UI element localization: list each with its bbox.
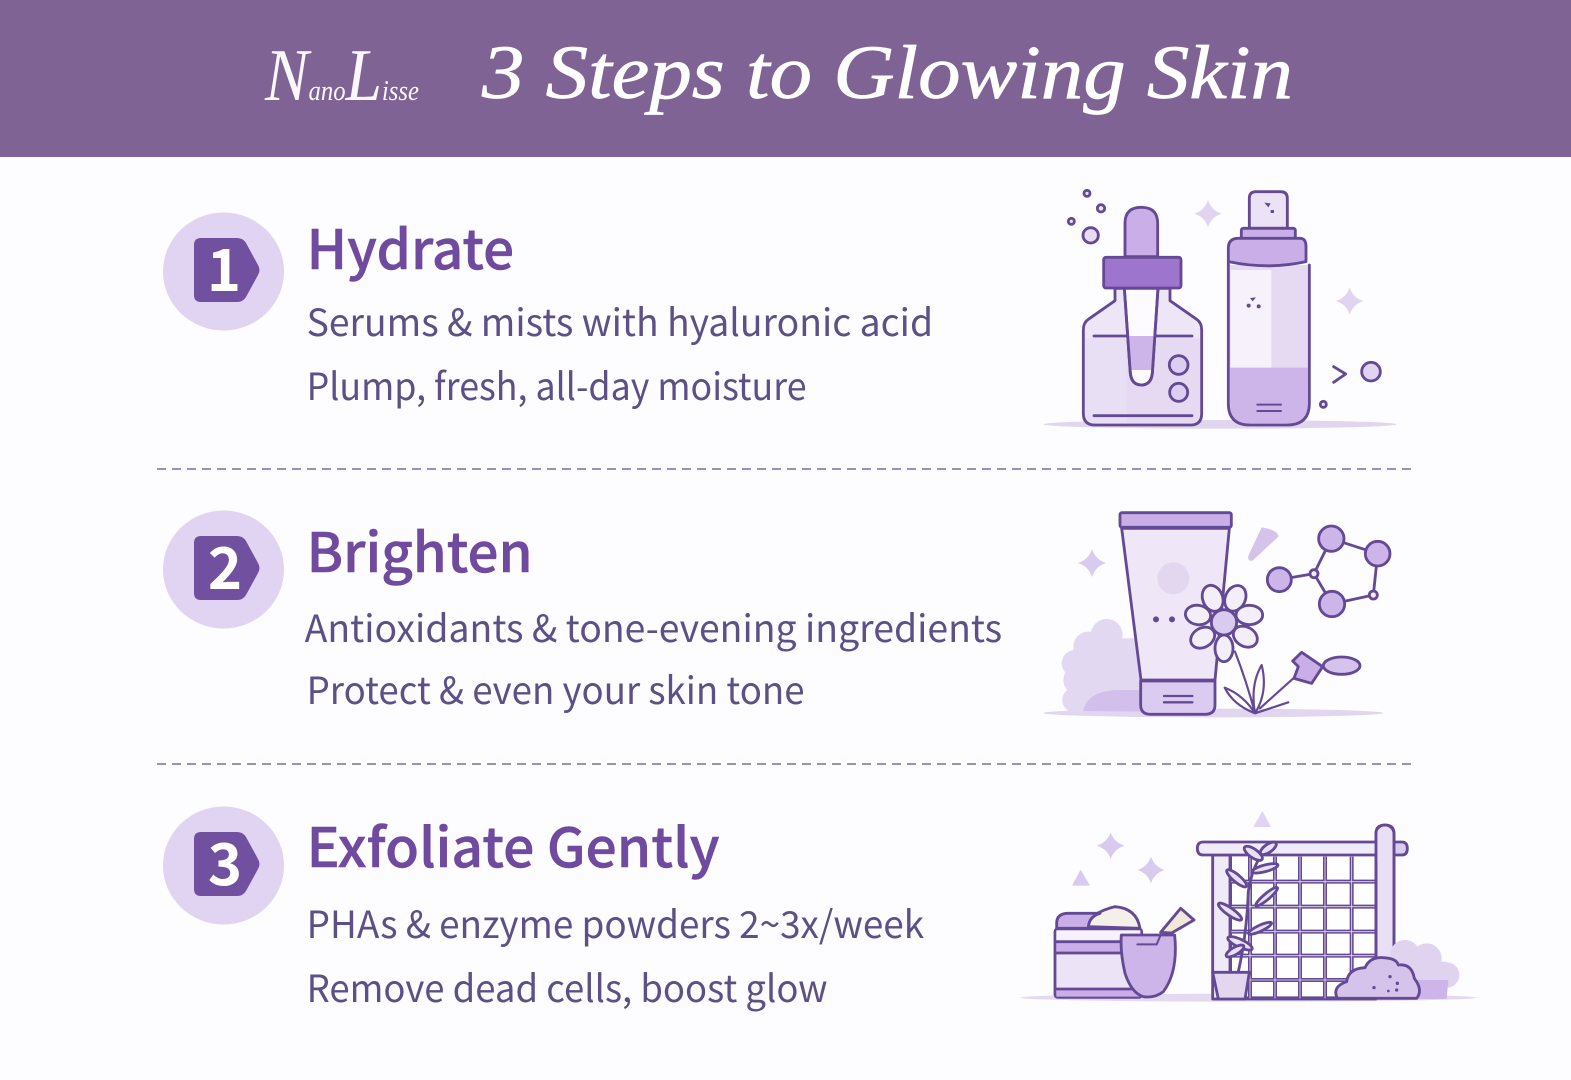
step 3 line 2: Remove dead cells, boost glow bbox=[307, 958, 828, 1013]
step 1 line 2: Plump, fresh, all-day moisture bbox=[307, 356, 807, 411]
climbing plant and pot bbox=[1213, 840, 1279, 999]
step 1 heading: Hydrate bbox=[307, 206, 514, 285]
step 2 bbox=[163, 509, 1002, 715]
step 1 number badge bbox=[163, 212, 284, 330]
step 3 number badge bbox=[163, 806, 284, 924]
logo: NanoLisse: NanoLisse bbox=[264, 35, 419, 117]
step 2 line 2: Protect & even your skin tone bbox=[307, 660, 805, 715]
flower stem and leaves bbox=[1225, 652, 1293, 713]
title: 3 Steps to Glowing Skin bbox=[481, 31, 1293, 115]
step 3 number badge: 3 bbox=[208, 818, 242, 902]
spray bottle bbox=[1249, 192, 1287, 228]
step 1 bbox=[163, 206, 933, 411]
back bush bbox=[1390, 940, 1459, 999]
sparkles bbox=[1194, 200, 1222, 227]
sparkles and triangles bbox=[1097, 832, 1125, 859]
sparkle and petal bbox=[1078, 549, 1106, 577]
divider 2 bbox=[157, 763, 1413, 765]
bottle body bbox=[1083, 288, 1202, 425]
dropper bud bbox=[1323, 657, 1360, 674]
divider 1 bbox=[157, 468, 1413, 470]
mortar and pestle bbox=[1161, 908, 1194, 933]
molecule bbox=[1279, 539, 1378, 604]
header band bbox=[0, 0, 1571, 157]
illustration: dropper bottle and mist spray bbox=[1043, 190, 1397, 429]
tube bbox=[1122, 528, 1229, 680]
front bush bbox=[1336, 958, 1419, 998]
step 3 heading: Exfoliate Gently bbox=[307, 804, 720, 883]
cream jar bbox=[1088, 907, 1140, 928]
step 2 number badge bbox=[163, 510, 284, 628]
bush bbox=[1062, 619, 1145, 713]
bubbles bbox=[1084, 190, 1090, 196]
step 1 number badge: 1 bbox=[207, 224, 241, 308]
flower bbox=[1184, 582, 1263, 662]
illustration: cream jar, mortar and lattice bbox=[1020, 811, 1477, 1002]
lattice grid bbox=[1197, 825, 1407, 999]
step 2 line 1: Antioxidants & tone-evening ingredients bbox=[305, 598, 1002, 653]
step 2 heading: Brighten bbox=[307, 509, 533, 588]
dropper bbox=[1125, 207, 1158, 257]
illustration: tube, flower and molecule bbox=[1043, 513, 1390, 717]
step 3 line 1: PHAs & enzyme powders 2~3x/week bbox=[307, 894, 924, 949]
step 3 bbox=[163, 804, 924, 1013]
step 2 number badge: 2 bbox=[208, 522, 242, 606]
step 1 line 1: Serums & mists with hyaluronic acid bbox=[307, 292, 933, 347]
